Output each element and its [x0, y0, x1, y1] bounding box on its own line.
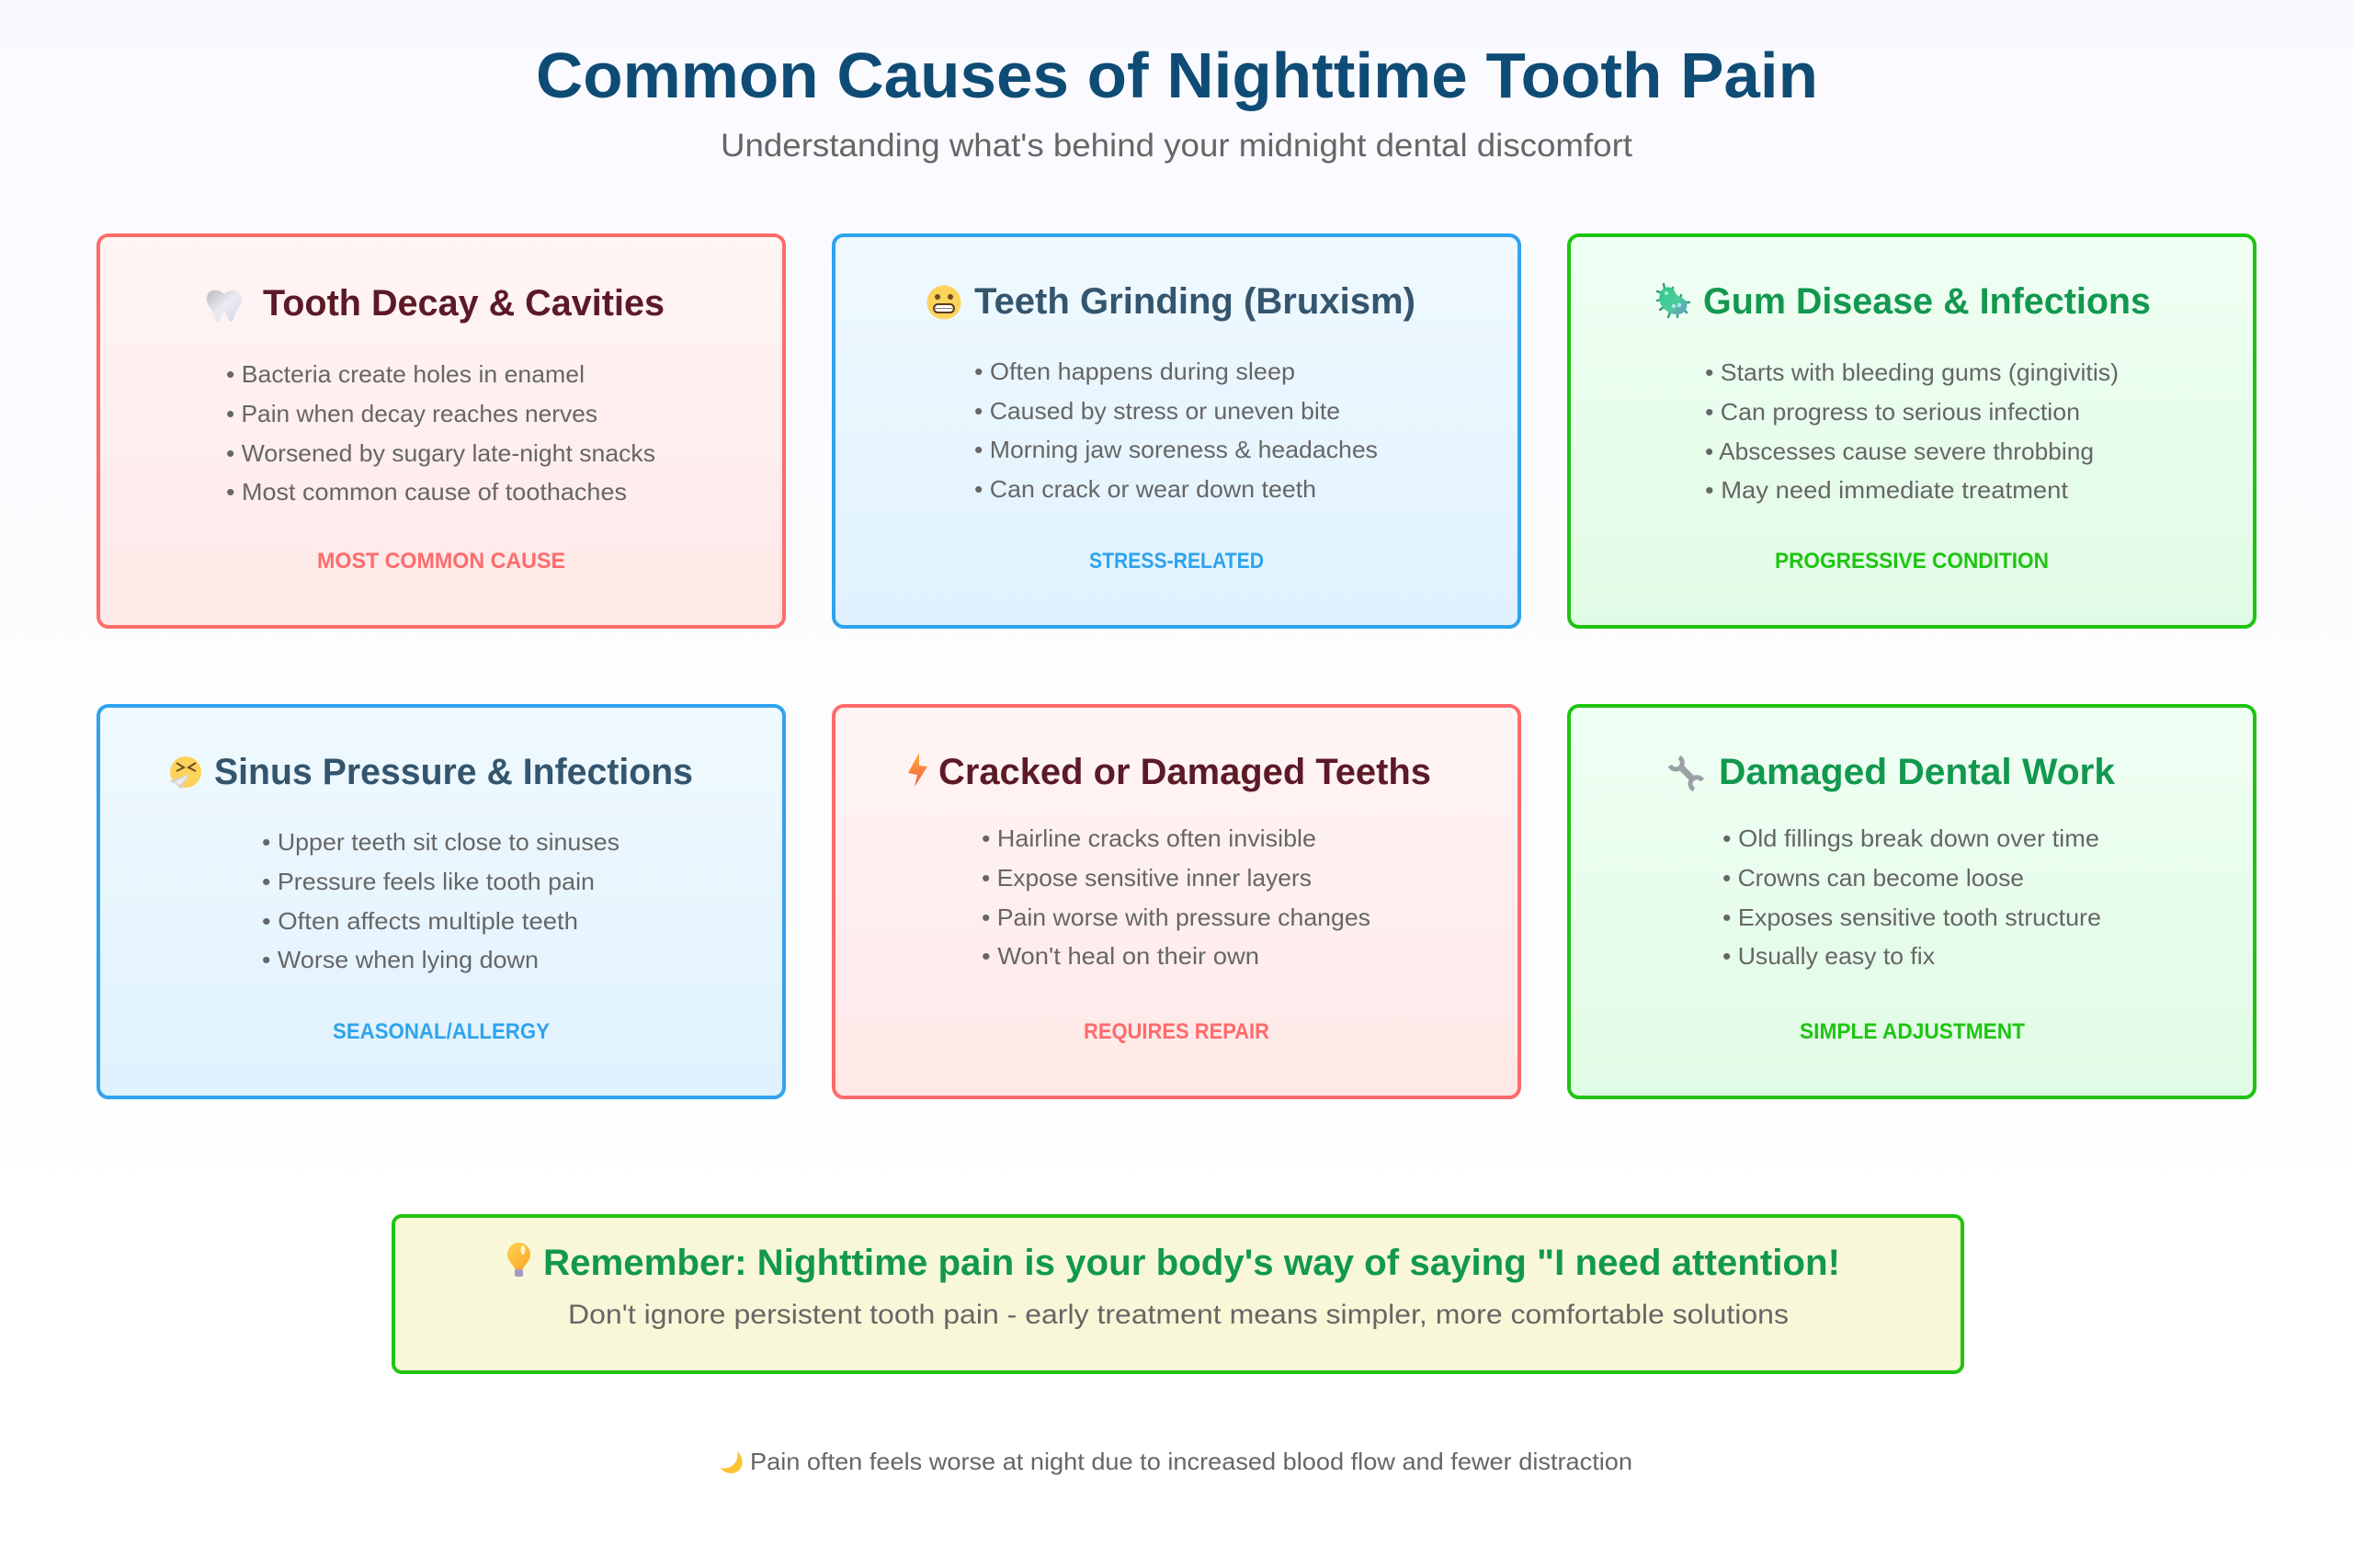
icon: tooth [207, 290, 242, 322]
bullet list: • Bacteria create holes in enamel [226, 360, 585, 388]
heading: Cracked or Damaged Teeths [938, 752, 1431, 792]
heading: Gum Disease & Infections [1703, 281, 2151, 322]
bullet list: • Starts with bleeding gums (gingivitis) [1705, 358, 2119, 386]
panel: gum disease [1569, 235, 2255, 627]
icon: grimacing face [926, 285, 961, 320]
subtitle: Understanding what's behind your midnight dental discomfort [721, 128, 1632, 164]
bullet list [262, 828, 620, 973]
bullet list: • May need immediate treatment [1705, 476, 2069, 504]
bullet list: • Often happens during sleep [974, 358, 1295, 385]
icon: wrench [1670, 757, 1702, 790]
heading: Damaged Dental Work [1719, 752, 2116, 792]
bullet list: • Most common cause of toothaches [226, 478, 627, 506]
bullet list: • Morning jaw soreness & headaches [974, 436, 1378, 463]
bullet list: • Pressure feels like tooth pain [262, 868, 595, 895]
bullet list: • Can progress to serious infection [1705, 398, 2080, 426]
bullet list: • Hairline cracks often invisible [982, 824, 1316, 852]
bullet list [982, 824, 1370, 970]
bullet list [1705, 358, 2119, 504]
panel: teeth grinding [834, 235, 1519, 627]
panel: damaged dental work [1569, 706, 2255, 1097]
bullet list: • Expose sensitive inner layers [982, 864, 1312, 892]
bullet list [226, 360, 655, 506]
icon: sneezing face [169, 756, 201, 790]
icon: germ [1657, 284, 1689, 317]
bullet list: • Exposes sensitive tooth structure [1722, 903, 2101, 931]
footnote text: Pain often feels worse at night due to increased blood flow and fewer distraction [750, 1448, 1632, 1475]
bullet list [974, 358, 1378, 503]
bullet list: • Old fillings break down over time [1722, 824, 2099, 852]
callout text: Don't ignore persistent tooth pain - early treatment means simpler, more comfortable solutions [568, 1300, 1789, 1330]
bullet list: • Won't heal on their own [982, 942, 1259, 970]
bullet list: • Pain worse with pressure changes [982, 903, 1370, 931]
heading: Tooth Decay & Cavities [263, 283, 665, 324]
heading: Sinus Pressure & Infections [214, 752, 693, 792]
tag: STRESS-RELATED [1089, 549, 1264, 574]
icon: crescent moon [721, 1451, 743, 1473]
bullet list: • Pain when decay reaches nerves [226, 400, 597, 427]
bullet list: • Caused by stress or uneven bite [974, 397, 1340, 425]
title: Common Causes of Nighttime Tooth Pain [536, 40, 1818, 111]
tag: MOST COMMON CAUSE [317, 549, 565, 574]
callout heading: Remember: Nighttime pain is your body's way of saying "I need attention! [543, 1243, 1840, 1283]
panel: cracked teeth [834, 706, 1519, 1097]
footnote [721, 1448, 1632, 1475]
bullet list: • Can crack or wear down teeth [974, 475, 1316, 503]
bullet list: • Usually easy to fix [1722, 942, 1935, 970]
tag: SEASONAL/ALLERGY [333, 1019, 550, 1044]
bullet list: • Worse when lying down [262, 946, 539, 973]
tag: REQUIRES REPAIR [1084, 1019, 1269, 1044]
bullet list: • Upper teeth sit close to sinuses [262, 828, 620, 856]
bullet list [1722, 824, 2101, 970]
bullet list: • Crowns can become loose [1722, 864, 2024, 892]
panel: tooth decay [98, 235, 784, 627]
bullet list: • Abscesses cause severe throbbing [1705, 437, 2094, 465]
callout: remember [393, 1216, 1962, 1372]
tag: SIMPLE ADJUSTMENT [1800, 1019, 2025, 1044]
tag: PROGRESSIVE CONDITION [1775, 549, 2049, 574]
heading: Teeth Grinding (Bruxism) [974, 281, 1415, 322]
bullet list: • Worsened by sugary late-night snacks [226, 439, 655, 467]
icon: light bulb [507, 1243, 530, 1277]
panel: sinus pressure [98, 706, 784, 1097]
icon: lightning bolt [908, 753, 927, 787]
bullet list: • Often affects multiple teeth [262, 907, 578, 935]
